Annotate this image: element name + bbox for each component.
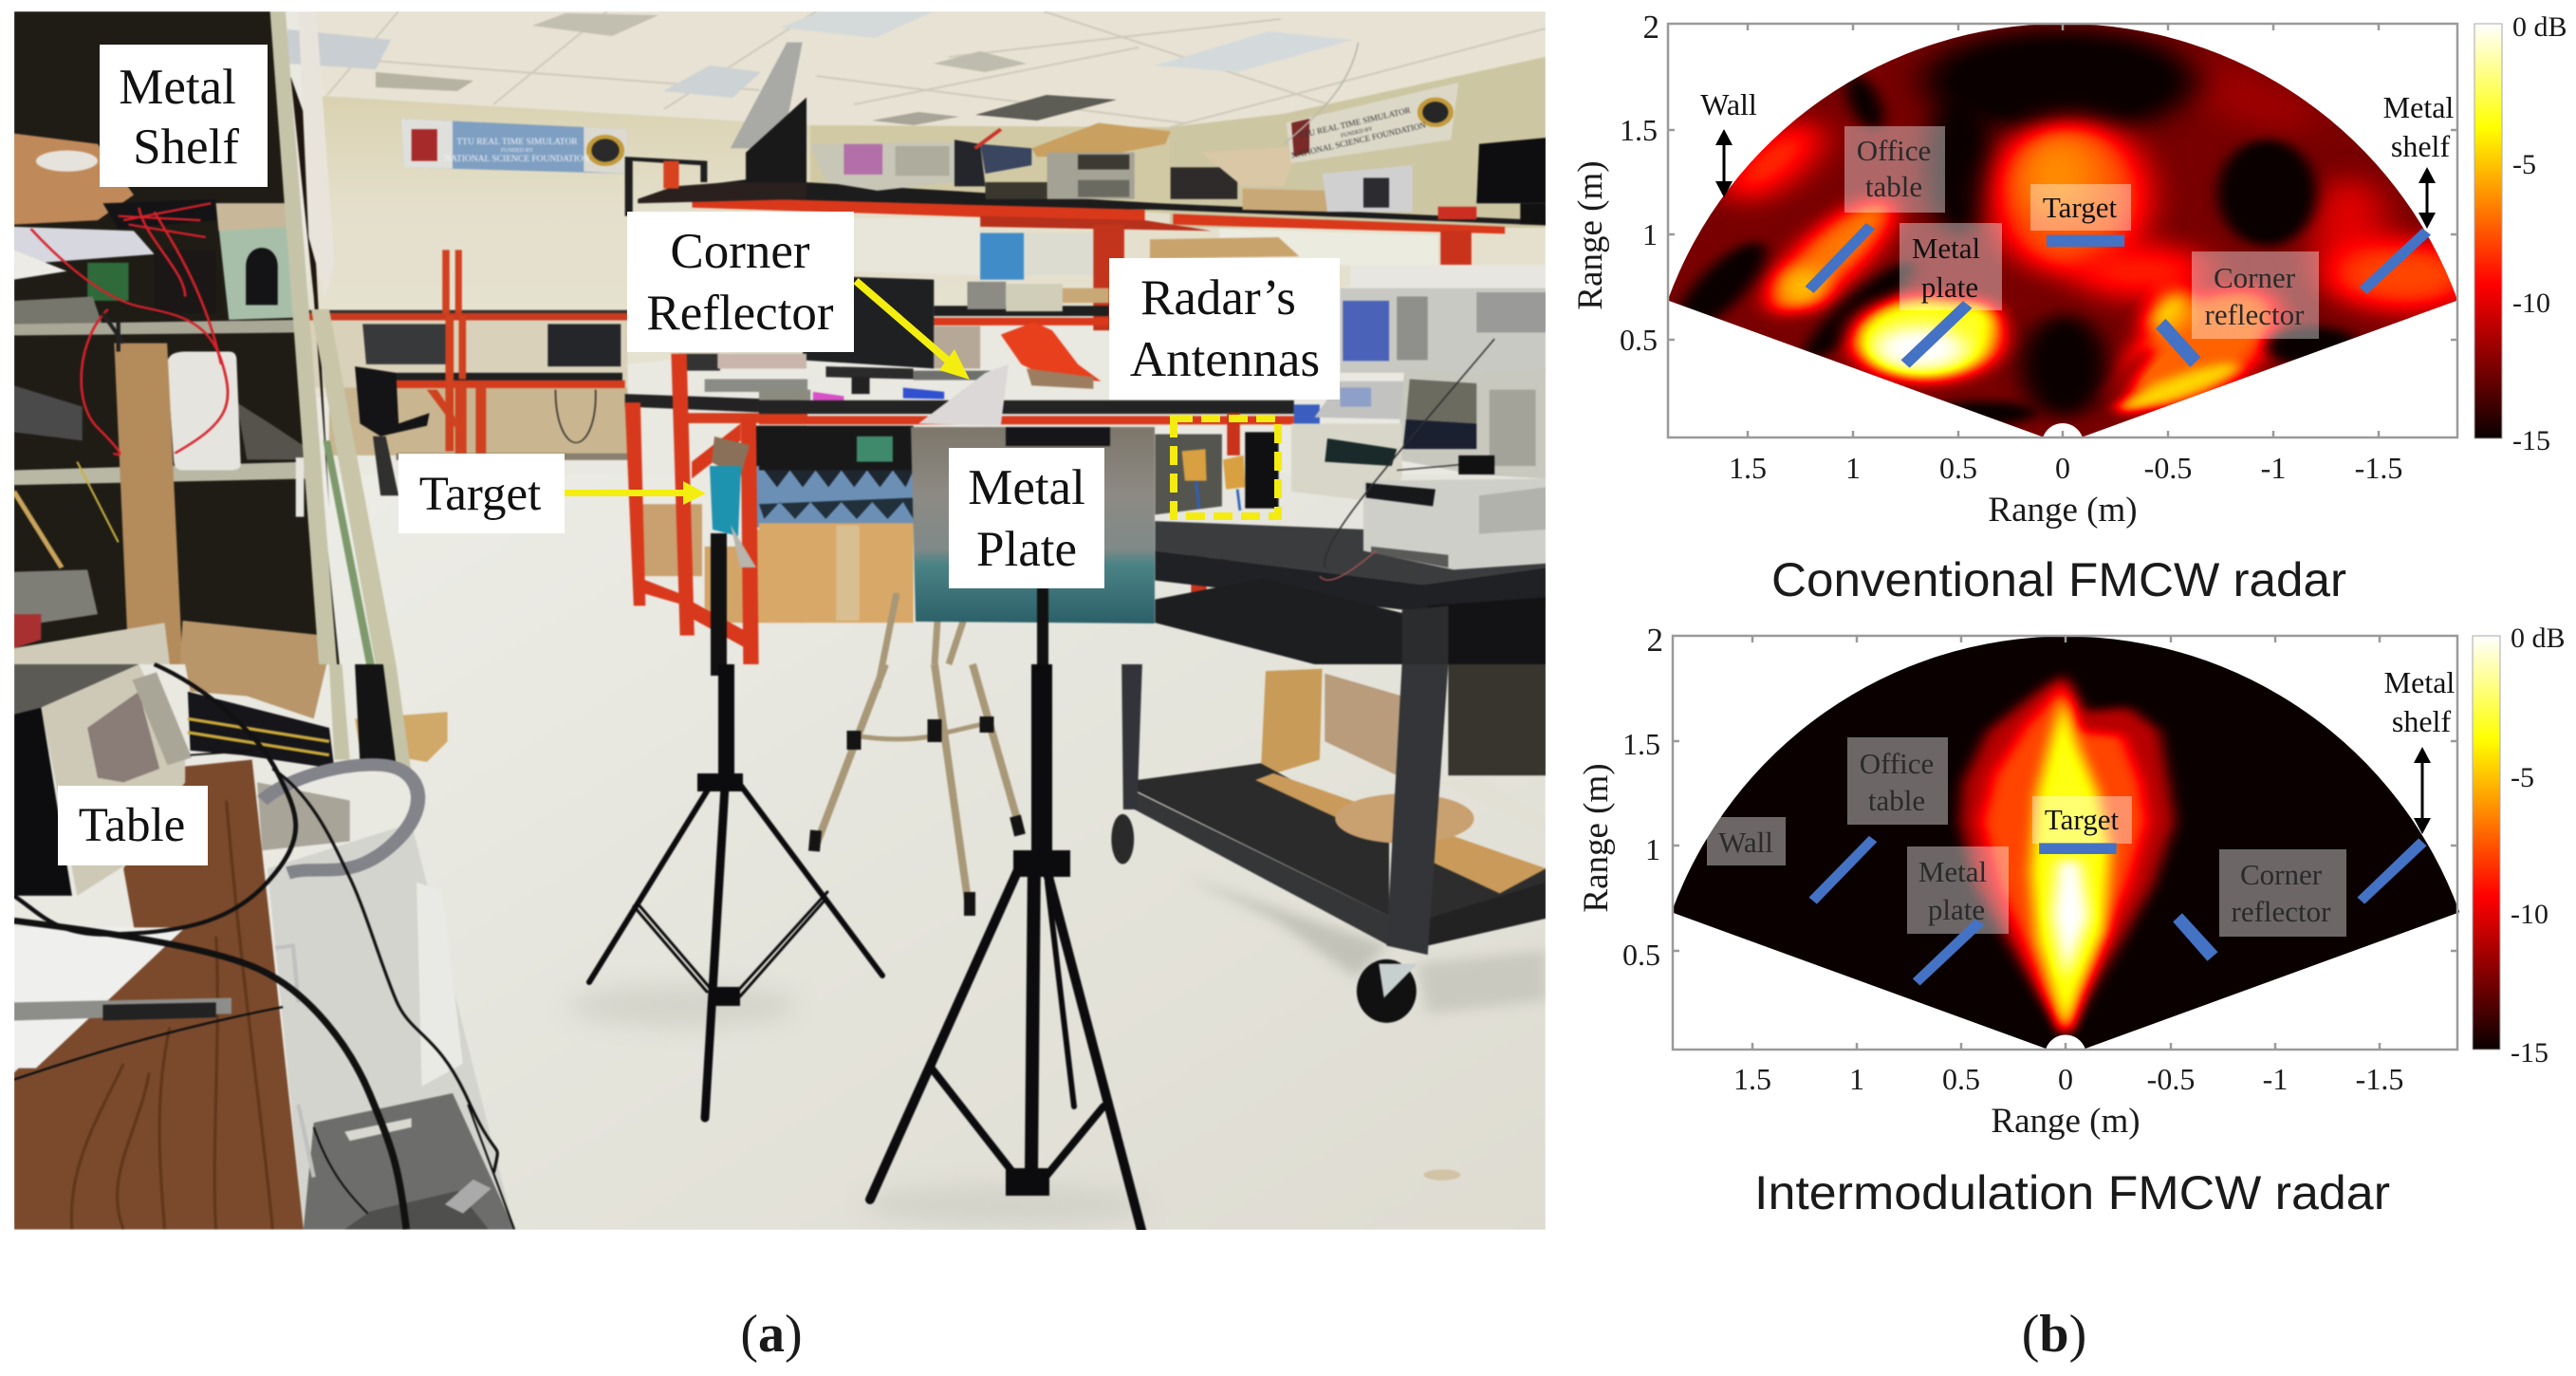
- radar antennas: [1155, 432, 1279, 514]
- colour bar: -10: [2511, 899, 2548, 930]
- annotation: metal shelf: shelf: [2392, 704, 2451, 738]
- banner: second sign: [1287, 83, 1458, 163]
- y axis ticks: [1622, 622, 1663, 972]
- annotation: metal plate: [1907, 846, 2009, 934]
- annotation: target: [2030, 184, 2131, 231]
- y axis title: Range (m): [1571, 160, 1610, 310]
- x axis ticks: 1: [1845, 451, 1861, 485]
- plot frame and ticks: [1668, 24, 2457, 437]
- tripod near: [870, 664, 1142, 1234]
- target on small tripod: [710, 437, 756, 676]
- panel: lab photograph: [14, 11, 1546, 1234]
- annotation: corner reflector: Corner: [2214, 261, 2296, 294]
- annotation: metal shelf: [2383, 90, 2454, 229]
- bench top items: [759, 322, 1101, 401]
- y axis ticks: 1: [1645, 832, 1660, 866]
- x axis ticks: -0.5: [2147, 1062, 2195, 1096]
- label: Corner Reflector: [627, 212, 854, 352]
- annotation: office table: Office: [1860, 747, 1934, 780]
- colour bar: 0 dB: [2512, 11, 2567, 43]
- annotation: metal shelf: Metal: [2383, 90, 2454, 124]
- x axis ticks: 1.5: [1729, 451, 1767, 485]
- label: Radar's Antennas: Antennas: [1130, 332, 1320, 387]
- x axis ticks: -1.5: [2356, 1062, 2403, 1096]
- x axis ticks: -0.5: [2144, 451, 2192, 485]
- left metal shelf with items: [14, 11, 396, 664]
- colour bar: -15: [2511, 1037, 2548, 1069]
- x axis ticks: 0.5: [1942, 1062, 1980, 1096]
- y axis ticks: 0.5: [1622, 938, 1660, 972]
- annotation: target: Target: [2045, 803, 2119, 836]
- y axis ticks: 1.5: [1622, 727, 1660, 761]
- y axis ticks: 1: [1642, 217, 1658, 251]
- annotation: metal plate: plate: [1928, 893, 1985, 926]
- y axis title: Range (m): [1577, 763, 1616, 913]
- label: Corner Reflector: Corner: [670, 224, 810, 279]
- annotation: metal shelf: [2384, 665, 2455, 834]
- label: Table: Table: [79, 799, 185, 852]
- colour bar: -5: [2512, 149, 2536, 180]
- annotation: target: Target: [2043, 191, 2117, 224]
- x axis ticks: 1: [1849, 1062, 1864, 1096]
- y axis ticks: 2: [1643, 9, 1659, 46]
- test instruments at right: [1155, 265, 1546, 664]
- banner text: TTU REAL TIME SIMULATOR: [456, 138, 578, 147]
- arrow: corner reflector pointer: [856, 281, 970, 380]
- annotation: wall: [1707, 817, 1786, 865]
- top shelf and instruments: [693, 43, 1546, 394]
- annotation: corner reflector: reflector: [2232, 895, 2331, 928]
- plot frame and ticks: [1673, 636, 2457, 1050]
- annotation: office table: table: [1865, 170, 1922, 203]
- x axis ticks: -1: [2261, 451, 2286, 485]
- colour bar: -10: [2512, 288, 2550, 319]
- ceiling, wall, floor: [287, 11, 1546, 1230]
- banner text: NATIONAL SCIENCE FOUNDATION: [444, 155, 590, 164]
- rolling cart lower section: [1111, 664, 1546, 1181]
- colour bar: 0 dB: [2511, 623, 2566, 654]
- x axis ticks: 0: [2058, 1062, 2073, 1096]
- label: Metal Plate: Plate: [976, 522, 1077, 577]
- annotation: metal plate: Metal: [1918, 855, 1987, 888]
- x axis ticks: 0: [2055, 451, 2070, 485]
- reflector position bars: [1808, 836, 2427, 985]
- label: Metal Plate: Metal: [968, 460, 1085, 515]
- reflector position bars: [1806, 223, 2431, 368]
- annotation: office table: [1844, 126, 1945, 213]
- label: Metal Shelf: Metal: [119, 60, 236, 115]
- highlight box: radar antennas: [1174, 418, 1278, 516]
- annotation: wall: Wall: [1700, 87, 1757, 121]
- x axis title: Range (m): [1991, 1102, 2140, 1141]
- label: Corner Reflector: Reflector: [646, 286, 834, 341]
- annotation: metal shelf: Metal: [2384, 665, 2455, 699]
- back wall desks and banner: [308, 119, 707, 495]
- arrow: target pointer: [565, 481, 706, 505]
- x axis ticks: 0.5: [1939, 451, 1977, 485]
- annotation: metal shelf: shelf: [2391, 129, 2450, 163]
- x axis ticks: -1: [2263, 1062, 2288, 1096]
- x axis ticks: -1.5: [2355, 451, 2402, 485]
- annotation: wall: Wall: [1718, 826, 1773, 859]
- label: Metal Shelf: Shelf: [133, 120, 239, 175]
- second sign text: FUNDED BY: [1341, 126, 1374, 139]
- annotation: office table: table: [1868, 784, 1925, 817]
- x axis ticks: 1.5: [1733, 1062, 1771, 1096]
- metal plate with stand: [911, 427, 1155, 674]
- annotation: corner reflector: [2219, 849, 2346, 937]
- banner: TTU real time simulator: [401, 119, 627, 174]
- x axis ticks: [1729, 451, 2402, 485]
- y axis ticks: 2: [1647, 622, 1663, 659]
- heat map: intermodulation: [1613, 617, 2534, 1089]
- colour bar: [2474, 11, 2567, 456]
- heat map: conventional: [1613, 0, 2534, 473]
- chart title: conventional: Conventional FMCW radar: [1771, 553, 2346, 606]
- label: Target: [398, 454, 565, 533]
- label: Radar's Antennas: [1109, 258, 1340, 400]
- label: Target: Target: [419, 468, 541, 521]
- annotation: office table: [1847, 737, 1948, 825]
- second sign text: NATIONAL SCIENCE FOUNDATION: [1290, 120, 1427, 160]
- annotation: corner reflector: Corner: [2240, 858, 2323, 891]
- banner text: FUNDED BY: [501, 148, 534, 154]
- label: Metal Shelf: [100, 45, 268, 187]
- annotation: office table: Office: [1857, 134, 1931, 167]
- caption: (b): (b): [2022, 1305, 2086, 1364]
- chart title: intermodulation: Intermodulation FMCW radar: [1754, 1166, 2390, 1219]
- label: Radar's Antennas: Radar’s: [1140, 270, 1296, 325]
- annotation: corner reflector: reflector: [2205, 298, 2305, 331]
- colour bar: -5: [2511, 762, 2534, 793]
- tripod far: [589, 664, 882, 1118]
- banner text: [444, 138, 590, 164]
- photo scene: [14, 11, 1546, 1234]
- annotation: target: [2032, 796, 2132, 844]
- panel: intermodulation FMCW radar heat map: [1577, 617, 2566, 1219]
- table, cables and oscilloscope: [14, 664, 514, 1229]
- colour bar: [2473, 623, 2566, 1069]
- x axis ticks: [1733, 1062, 2403, 1096]
- y axis ticks: [1620, 9, 1659, 357]
- label: Table: [58, 786, 208, 865]
- second sign text: TTU REAL TIME SIMULATOR: [1298, 105, 1411, 140]
- x axis title: Range (m): [1988, 491, 2138, 530]
- annotation: wall: [1700, 87, 1757, 197]
- caption: (a): (a): [740, 1305, 803, 1364]
- tan tripod: [814, 593, 1021, 916]
- annotation: corner reflector: [2192, 251, 2319, 339]
- annotation: metal plate: [1900, 223, 2002, 310]
- y axis ticks: 1.5: [1620, 113, 1658, 147]
- colour bar: -15: [2512, 425, 2550, 456]
- floor shadows under tripods: [569, 985, 1148, 1224]
- annotation: metal plate: Metal: [1912, 232, 1980, 265]
- label: Metal Plate: [949, 448, 1104, 588]
- annotation: metal plate: plate: [1921, 270, 1978, 304]
- y axis ticks: 0.5: [1620, 323, 1658, 357]
- main red workbench: [625, 43, 807, 664]
- panel: conventional FMCW radar heat map: [1571, 0, 2567, 606]
